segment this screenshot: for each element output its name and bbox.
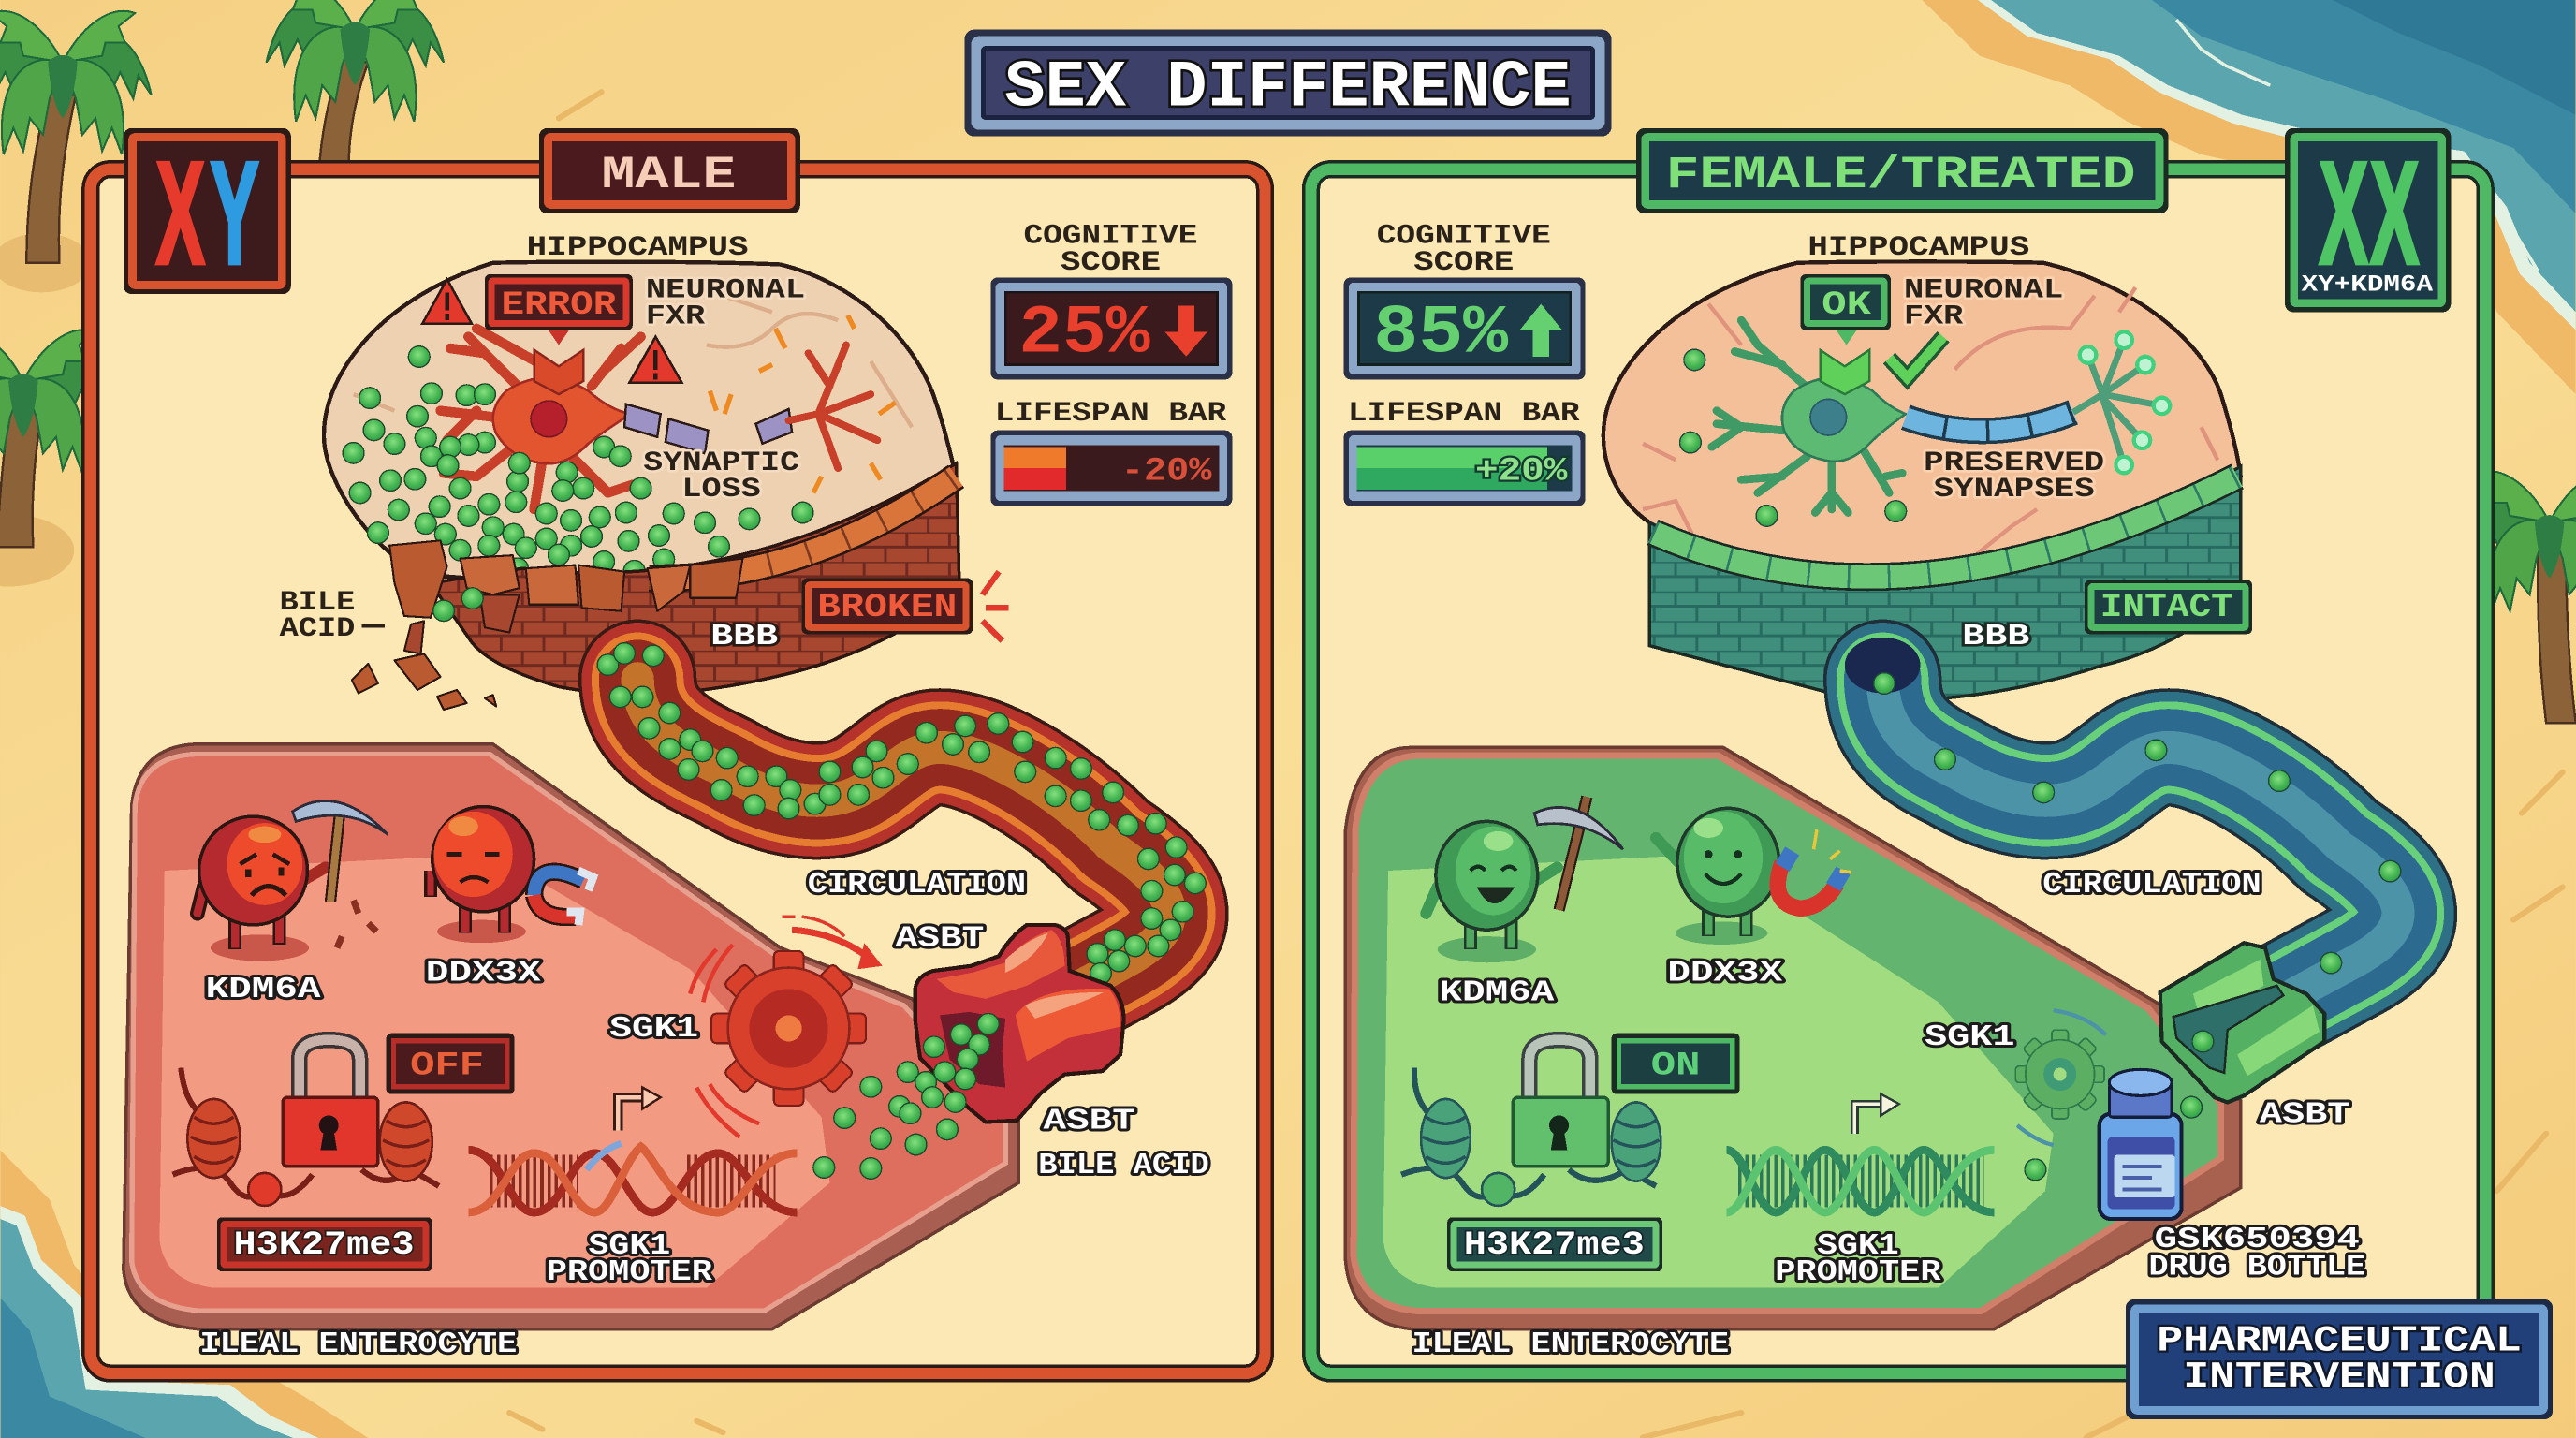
badge: H3K27me3 <box>217 1217 432 1271</box>
label: DDX3X: DDX3X <box>1667 958 1782 990</box>
label: neuronal FXR: FXR <box>1904 301 1963 332</box>
motion arcs <box>690 945 759 1137</box>
icon: SGK1 promoter DNA <box>468 1088 797 1212</box>
circulation label: CIRCULATION <box>808 869 1026 902</box>
stat: lifespan bar +20%: +20% <box>1475 452 1568 490</box>
bile acid dots in tube top <box>597 643 681 724</box>
badge: broken <box>802 572 1009 640</box>
label: SGK1 promoter: PROMOTER <box>1775 1256 1941 1289</box>
icon: pickaxe <box>1559 797 1587 910</box>
bile acid dots near drug <box>2025 1096 2203 1181</box>
bile acid dot in tube top <box>1874 673 1895 694</box>
badge: male <box>539 128 800 213</box>
icon: warning triangle 1 <box>422 279 472 324</box>
badge: H3K27me3: H3K27me3 <box>233 1226 414 1264</box>
label: cognitive score: SCORE <box>1061 246 1161 278</box>
icon: GSK650394 drug bottle <box>2100 1069 2182 1219</box>
icon: SGK1 promoter DNA active <box>1727 1094 1995 1212</box>
icon: chromatin with lock <box>173 1040 439 1206</box>
wall: intact blood-brain barrier <box>1649 466 2241 701</box>
icon: FXR receptor <box>534 350 583 394</box>
label: lifespan bar: LIFESPAN BAR <box>1348 397 1580 429</box>
badge: OK: OK <box>1822 286 1872 324</box>
brain creases <box>354 296 912 427</box>
callout: pharmaceutical intervention: PHARMACEUTICAL <box>2157 1320 2522 1361</box>
labels: ASBT and bile acid: BILE ACID <box>1038 1150 1209 1182</box>
brain: male hippocampus <box>324 262 957 592</box>
enterocyte: male <box>124 744 1018 1329</box>
ASBT transporter: male <box>915 925 1124 1122</box>
bile acid dots in brain <box>343 346 813 581</box>
label: preserved synapses: SYNAPSES <box>1934 473 2095 505</box>
axon: broken myelin <box>624 404 792 453</box>
callout: pharmaceutical intervention: INTERVENTION <box>2183 1357 2496 1398</box>
palm tree 4 <box>2461 471 2576 723</box>
labels: ASBT and bile acid: ASBT <box>896 923 984 956</box>
label: bile acid: BILE <box>280 586 355 618</box>
label: SGK1 promoter: SGK1 <box>588 1230 670 1263</box>
label: KDM6A: KDM6A <box>206 974 321 1006</box>
axon terminals: glowing synapses <box>2073 331 2170 473</box>
label: cognitive score <box>1377 220 1551 278</box>
ASBT transporter: treated <box>2160 943 2324 1102</box>
label: synaptic loss: SYNAPTIC <box>643 447 799 478</box>
label: ASBT: ASBT <box>2260 1098 2349 1131</box>
wet sand: bottom left <box>0 1150 370 1438</box>
ocean: bottom left <box>0 1206 320 1438</box>
circulation label: CIRCULATION <box>2042 869 2261 902</box>
icon: warning triangle 2 <box>629 337 682 383</box>
stat: cognitive score 25% <box>990 278 1232 379</box>
axon terminals: withered <box>789 345 877 468</box>
label: KDM6A: KDM6A <box>1439 977 1554 1010</box>
label: bile acid: ACID <box>280 612 355 644</box>
stat: cognitive score 25%: 25% <box>1018 296 1150 374</box>
bile acid dots in tube <box>638 713 1206 984</box>
icon: magnet on <box>1778 862 1837 908</box>
badge: XY chromosomes: Y <box>211 131 258 294</box>
label: preserved synapses: PRESERVED <box>1924 447 2104 478</box>
label: cognitive score: SCORE <box>1413 246 1514 278</box>
badge: ON <box>1612 1034 1740 1094</box>
label: neuronal FXR: NEURONAL <box>646 274 805 306</box>
badge: XX chromosomes: X <box>2370 131 2419 294</box>
badge: XX chromosomes: X <box>2320 131 2367 294</box>
badge: XX chromosomes <box>2285 128 2451 312</box>
circulation tube: treated <box>1882 679 2398 1027</box>
label: cognitive score: COGNITIVE <box>1023 220 1197 252</box>
rubble <box>352 653 496 710</box>
badge: OFF <box>387 1034 515 1094</box>
broken bricks <box>389 540 742 653</box>
label: preserved synapses <box>1924 447 2104 505</box>
label: drug name <box>2148 1224 2365 1284</box>
label: neuronal FXR <box>646 274 805 332</box>
label: SGK1 promoter <box>547 1230 712 1289</box>
label: drug name: GSK650394 <box>2155 1224 2360 1256</box>
brain: treated hippocampus <box>1603 261 2241 592</box>
character: DDX3X happy <box>1656 808 1852 945</box>
bile acid dots: uptake through ASBT <box>813 1013 999 1179</box>
label: cognitive score <box>1023 220 1197 278</box>
label: synaptic loss <box>643 447 799 505</box>
icon: chromatin with open lock <box>1401 1040 1661 1206</box>
label: SGK1: SGK1 <box>1925 1021 2014 1054</box>
synapse sparks <box>710 315 896 492</box>
stat: lifespan bar -20%: -20% <box>1121 452 1212 490</box>
badge: XX chromosomes: XY+KDM6A <box>2302 273 2433 299</box>
panel: male <box>91 128 1265 1373</box>
badge: H3K27me3 <box>1447 1217 1662 1271</box>
title text: SEX DIFFERENCE <box>1004 51 1572 125</box>
label: SGK1: SGK1 <box>609 1013 698 1046</box>
label: ileal enterocyte: ILEAL ENTEROCYTE <box>199 1328 517 1361</box>
bile acid dots: few in brain <box>1680 349 1907 526</box>
palm tree 1 <box>0 11 152 292</box>
character: KDM6A happy <box>1426 797 1623 962</box>
circulation tube: male <box>637 679 1169 1027</box>
label: drug name: DRUG BOTTLE <box>2148 1252 2365 1284</box>
neuron: damaged <box>441 315 896 509</box>
icon: check mark <box>1889 337 1943 378</box>
bile acid dots in tube <box>1934 740 2401 974</box>
stat: cognitive score 85%: 85% <box>1373 296 1509 374</box>
label: SGK1 promoter <box>1775 1230 1941 1289</box>
character: KDM6A sad <box>198 800 388 961</box>
icon: check mark fill <box>1889 337 1943 378</box>
stat: lifespan bar -20% <box>990 431 1232 506</box>
icon: magnet off <box>534 872 583 895</box>
badge: broken: BROKEN <box>817 589 957 626</box>
badge: ON: ON <box>1651 1048 1700 1085</box>
stat: lifespan bar +20% <box>1344 431 1586 506</box>
ocean: top right <box>1978 0 2576 330</box>
neuron: healthy <box>1712 320 2170 512</box>
label: ileal enterocyte: ILEAL ENTEROCYTE <box>1412 1328 1729 1361</box>
axon: intact myelin <box>1906 412 2073 431</box>
badge: male: MALE <box>602 149 736 201</box>
label: lifespan bar: LIFESPAN BAR <box>995 397 1226 429</box>
panel: female treated <box>1311 128 2485 1373</box>
tube mouth: treated <box>1845 638 1921 693</box>
badge: OFF: OFF <box>410 1048 484 1085</box>
badge: intact <box>2085 580 2252 634</box>
palm tree 3 <box>0 330 112 586</box>
badge: XY chromosomes <box>124 128 291 294</box>
label: neuronal FXR: FXR <box>646 301 705 332</box>
callout: pharmaceutical intervention <box>2126 1299 2553 1419</box>
badge: intact: INTACT <box>2100 589 2233 626</box>
label: SGK1 promoter: SGK1 <box>1817 1230 1899 1263</box>
icon: pickaxe <box>330 808 341 902</box>
icon: SGK1 gear inhibited <box>2015 1010 2106 1145</box>
wall: broken blood-brain barrier <box>352 463 959 710</box>
label: neuronal FXR: NEURONAL <box>1904 274 2063 306</box>
character: DDX3X neutral <box>431 807 593 943</box>
stat: cognitive score 85% <box>1344 278 1586 379</box>
badge: female treated: FEMALE/TREATED <box>1666 149 2135 201</box>
brain creases <box>1643 287 2217 559</box>
badge: XY chromosomes: X <box>156 131 204 294</box>
badge: error <box>485 274 633 345</box>
icon: SGK1 gear active <box>690 917 883 1137</box>
palm tree 2 <box>267 0 444 172</box>
label: hippocampus: HIPPOCAMPUS <box>527 231 749 263</box>
label: neuronal FXR <box>1904 274 2063 332</box>
enterocyte: treated <box>1345 747 2241 1329</box>
label: BBB: BBB <box>1962 621 2029 653</box>
badge: error: ERROR <box>501 286 617 324</box>
label: cognitive score: COGNITIVE <box>1377 220 1551 252</box>
labels: ASBT and bile acid: ASBT <box>1044 1105 1135 1137</box>
labels: ASBT and bile acid <box>896 923 1209 1182</box>
label: hippocampus: HIPPOCAMPUS <box>1808 231 2029 263</box>
bile acid dots near breach <box>433 588 483 622</box>
label: bile acid <box>280 586 385 644</box>
badge: H3K27me3: H3K27me3 <box>1464 1226 1645 1264</box>
label: SGK1 promoter: PROMOTER <box>547 1256 712 1289</box>
title banner <box>964 30 1612 137</box>
wet sand: top right <box>1922 0 2576 394</box>
badge: OK <box>1800 274 1891 345</box>
label: BBB: BBB <box>710 621 778 653</box>
arrow: activation <box>792 930 871 960</box>
icon: FXR receptor active <box>1821 350 1869 394</box>
label: DDX3X: DDX3X <box>426 958 541 990</box>
badge: female treated <box>1636 128 2169 213</box>
label: synaptic loss: LOSS <box>682 473 761 505</box>
